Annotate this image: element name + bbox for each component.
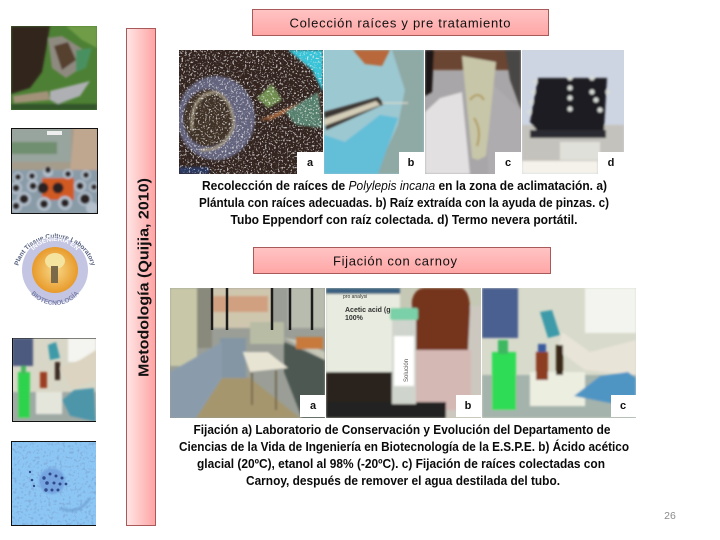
caption: fixation (179, 423, 629, 488)
photo strip: fixation (170, 288, 636, 418)
photo b: reagent bottles: 100% (345, 315, 364, 322)
logo: biotechnology laboratory seal: BIOTECNOLOGÍA (31, 291, 79, 306)
label letters: b (408, 157, 415, 169)
label letters: c (505, 157, 511, 169)
label c (611, 395, 636, 417)
caption: root collection: Plántula con raíces adecuadas. b) Raíz extraída con la ayuda de pinzas. c) (199, 196, 609, 210)
photo: trowel and soil (11, 26, 97, 110)
label letters (307, 157, 614, 169)
photo b: reagent bottles: Acetic acid (g (345, 307, 391, 314)
label b (456, 395, 481, 417)
label letters: b (465, 400, 472, 412)
caption: root collection (199, 179, 609, 227)
caption: fixation: Carnoy, después de remover el agua destilada del tubo. (246, 474, 560, 488)
caption: fixation: Ciencias de la Vida de Ingeniería en Biotecnología de la E.S.P.E. b) Ácido acético (179, 439, 629, 454)
photo b: root held with tweezers (324, 50, 424, 174)
label letters: a (310, 400, 317, 412)
photo a: seedling with roots (177, 50, 323, 174)
vertical band: methodology: Metodología (Quijia, 2010) (136, 178, 152, 377)
label letters (310, 400, 626, 412)
label b (399, 152, 424, 174)
logo: biotechnology laboratory seal: INGENIERÍA EN (31, 236, 79, 250)
photo a: laboratory (170, 288, 325, 418)
photo b: reagent bottles (326, 288, 482, 418)
vertical band: methodology (126, 28, 156, 526)
heading: root collection (252, 10, 548, 36)
label d (598, 152, 624, 174)
photo c: Eppendorf tube (425, 50, 521, 174)
label a (297, 152, 323, 174)
photo b: reagent bottles: pro analysi (343, 294, 367, 300)
photo c: fixation of roots (482, 288, 636, 418)
heading: carnoy fixation: Fijación con carnoy (333, 254, 458, 268)
photo d: portable cooler with rack (522, 50, 624, 174)
photo strip: root collection (177, 50, 624, 174)
label letters: c (620, 400, 626, 412)
photo: potted seedlings (10, 128, 99, 214)
caption: fixation: Fijación a) Laboratorio de Conservación y Evolución del Departamento de (194, 423, 611, 437)
photo b: reagent bottles: Solución (404, 359, 410, 382)
heading: carnoy fixation (254, 248, 550, 274)
caption: root collection: Tubo Eppendorf con raíz colectada. d) Termo nevera portátil. (230, 213, 578, 227)
caption: root collection: Recolección de raíces de Polylepis incana en la zona de aclimatación. a) (202, 179, 607, 193)
label a (300, 395, 325, 417)
caption: fixation: glacial (20ºC), etanol al 98% (-20ºC). c) Fijación de raíces colectadas con (197, 457, 605, 471)
label letters: d (608, 157, 614, 169)
photo: micrograph of root tip cells (11, 441, 96, 526)
photo: fixation at lab bench (12, 338, 96, 422)
logo: biotechnology laboratory seal (14, 233, 95, 306)
logo: biotechnology laboratory seal: Plant Tissue Culture Laboratory (14, 233, 95, 266)
label c (495, 152, 521, 174)
page number: 26 (664, 510, 676, 522)
label letters: a (307, 157, 314, 169)
heading: root collection: Colección raíces y pre tratamiento (290, 16, 510, 30)
